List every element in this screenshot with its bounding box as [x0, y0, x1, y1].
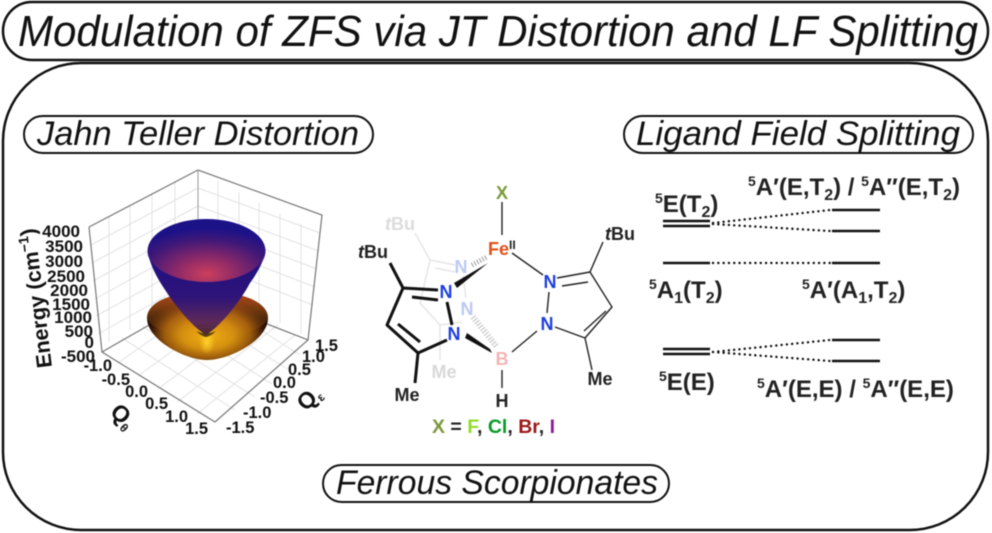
level labels: 2 — [701, 204, 710, 221]
energy axis tick labels: -500 — [61, 347, 95, 366]
energy axis tick labels — [42, 222, 95, 366]
energy axis tick labels: 500 — [65, 322, 93, 341]
Q-theta axis ticks: 0.0 — [125, 383, 148, 401]
energy axis tick labels: 0 — [85, 333, 94, 352]
level labels: A — [657, 277, 674, 304]
heading: Ligand Field Splitting: Ligand Field Splitting — [636, 115, 960, 153]
level labels: A″(E,E) — [870, 376, 954, 403]
molecule: ferrous scorpionate structure: Me — [394, 385, 420, 405]
level labels: 2 — [824, 187, 833, 204]
level labels: ) — [952, 174, 960, 201]
level labels: 5 — [802, 276, 810, 292]
molecule: ferrous scorpionate structure: N — [448, 324, 460, 344]
heading: Jahn Teller Distortion: Jahn Teller Distortion — [36, 115, 359, 153]
molecule: ferrous scorpionate structure: Fe — [488, 239, 509, 259]
level labels: 5 — [861, 173, 869, 189]
level labels: 2 — [706, 290, 715, 307]
molecule: ferrous scorpionate structure: B — [496, 349, 508, 369]
heavy front pyrazole bonds — [387, 263, 452, 383]
molecule: ferrous scorpionate structure: N — [540, 314, 554, 334]
level labels: ) — [710, 191, 718, 218]
wedge bonds — [454, 263, 488, 288]
Q-epsilon axis ticks: 0.0 — [273, 374, 296, 392]
Q-theta axis title: θ — [117, 421, 131, 435]
level labels: A′(E,E) / — [765, 376, 863, 403]
Q-epsilon axis ticks: 0.5 — [288, 361, 311, 379]
energy axis tick labels: 1000 — [54, 308, 92, 327]
level labels: 5 — [757, 375, 765, 391]
Q-epsilon axis ticks — [226, 337, 338, 437]
molecule: ferrous scorpionate structure: N — [544, 272, 556, 292]
Q-epsilon axis ticks: -1.0 — [243, 404, 271, 422]
surface: lower gold sheet — [147, 292, 268, 360]
Q-theta axis ticks: 1.0 — [165, 408, 188, 426]
level labels: A′(A — [810, 277, 858, 304]
energy axis tick labels: 3000 — [45, 252, 83, 271]
level labels: E(E) — [667, 369, 715, 396]
Q-epsilon axis ticks: 1.5 — [315, 337, 338, 355]
Q-epsilon axis ticks: -1.5 — [226, 419, 254, 437]
level labels: 5 — [659, 368, 667, 384]
level labels: 2 — [888, 290, 897, 307]
energy axis tick labels: 4000 — [42, 222, 80, 241]
molecule: ferrous scorpionate structure: Me — [431, 362, 457, 382]
molecule: ferrous scorpionate structure: Me — [587, 369, 613, 389]
dotted connectors — [713, 210, 830, 361]
legend: halide key: X = F, Cl, Br, I — [432, 416, 555, 438]
Q-theta axis title: Q — [105, 398, 136, 429]
energy axis tick labels: 3500 — [45, 237, 83, 256]
3D surface chart — [14, 170, 338, 438]
Q-theta axis ticks: -1.0 — [84, 357, 112, 375]
energy axis tick labels: 2500 — [47, 267, 85, 286]
molecule: ferrous scorpionate structure: N — [460, 299, 474, 319]
energy axis tick labels: 1500 — [52, 295, 90, 314]
solid bonds — [502, 202, 612, 388]
level labels: 5 — [748, 173, 756, 189]
surface: upper purple cone — [148, 219, 266, 335]
energy axis tick labels: 2000 — [50, 281, 88, 300]
Q-theta axis ticks — [84, 357, 208, 438]
level labels: ) — [897, 277, 905, 304]
level labels: 2 — [943, 187, 952, 204]
Q-epsilon axis ticks: -0.5 — [260, 389, 288, 407]
molecule: ferrous scorpionate structure — [358, 183, 635, 438]
level labels: A″(E,T — [869, 174, 943, 201]
level labels: ,T — [867, 277, 889, 304]
energy axis title: Energy (cm — [19, 250, 57, 369]
level labels: 5 — [655, 190, 663, 206]
level labels: ) — [715, 277, 723, 304]
level labels: ) / — [833, 174, 861, 201]
level labels: (T — [683, 277, 706, 304]
Q-epsilon axis ticks: 1.0 — [302, 348, 325, 366]
hashed bonds — [472, 257, 487, 265]
molecule: ferrous scorpionate structure: II — [509, 238, 516, 252]
energy axis title: −1 — [15, 235, 33, 253]
Q-theta axis ticks: 0.5 — [145, 395, 168, 413]
level labels: 5 — [863, 375, 871, 391]
level lines — [663, 210, 880, 361]
molecule: ferrous scorpionate structure: tBu — [605, 224, 635, 244]
energy axis title: ) — [16, 227, 41, 237]
molecule: ferrous scorpionate structure: tBu — [358, 242, 388, 262]
level labels: 5 — [649, 276, 657, 292]
molecule: ferrous scorpionate structure: H — [496, 391, 508, 411]
Q-theta axis ticks: 1.5 — [185, 420, 208, 438]
molecule: ferrous scorpionate structure: tBu — [385, 214, 415, 234]
level labels: E(T — [663, 191, 702, 218]
atom labels: X — [496, 183, 508, 203]
heading: Ferrous Scorpionates: Ferrous Scorpionates — [336, 464, 658, 502]
molecule: ferrous scorpionate structure: N — [454, 257, 468, 277]
level labels — [649, 173, 960, 403]
level labels: 1 — [858, 290, 867, 307]
Q-theta axis ticks: -0.5 — [102, 371, 130, 389]
level labels: 1 — [674, 290, 683, 307]
chart grid box — [89, 170, 322, 422]
energy level diagram — [649, 173, 960, 403]
Q-epsilon axis title: Q — [291, 385, 322, 416]
Q-epsilon axis title: ε — [314, 390, 328, 404]
faded rear pyrazole — [415, 233, 466, 360]
level labels: A′(E,T — [756, 174, 825, 201]
molecule: ferrous scorpionate structure: N — [440, 282, 452, 302]
